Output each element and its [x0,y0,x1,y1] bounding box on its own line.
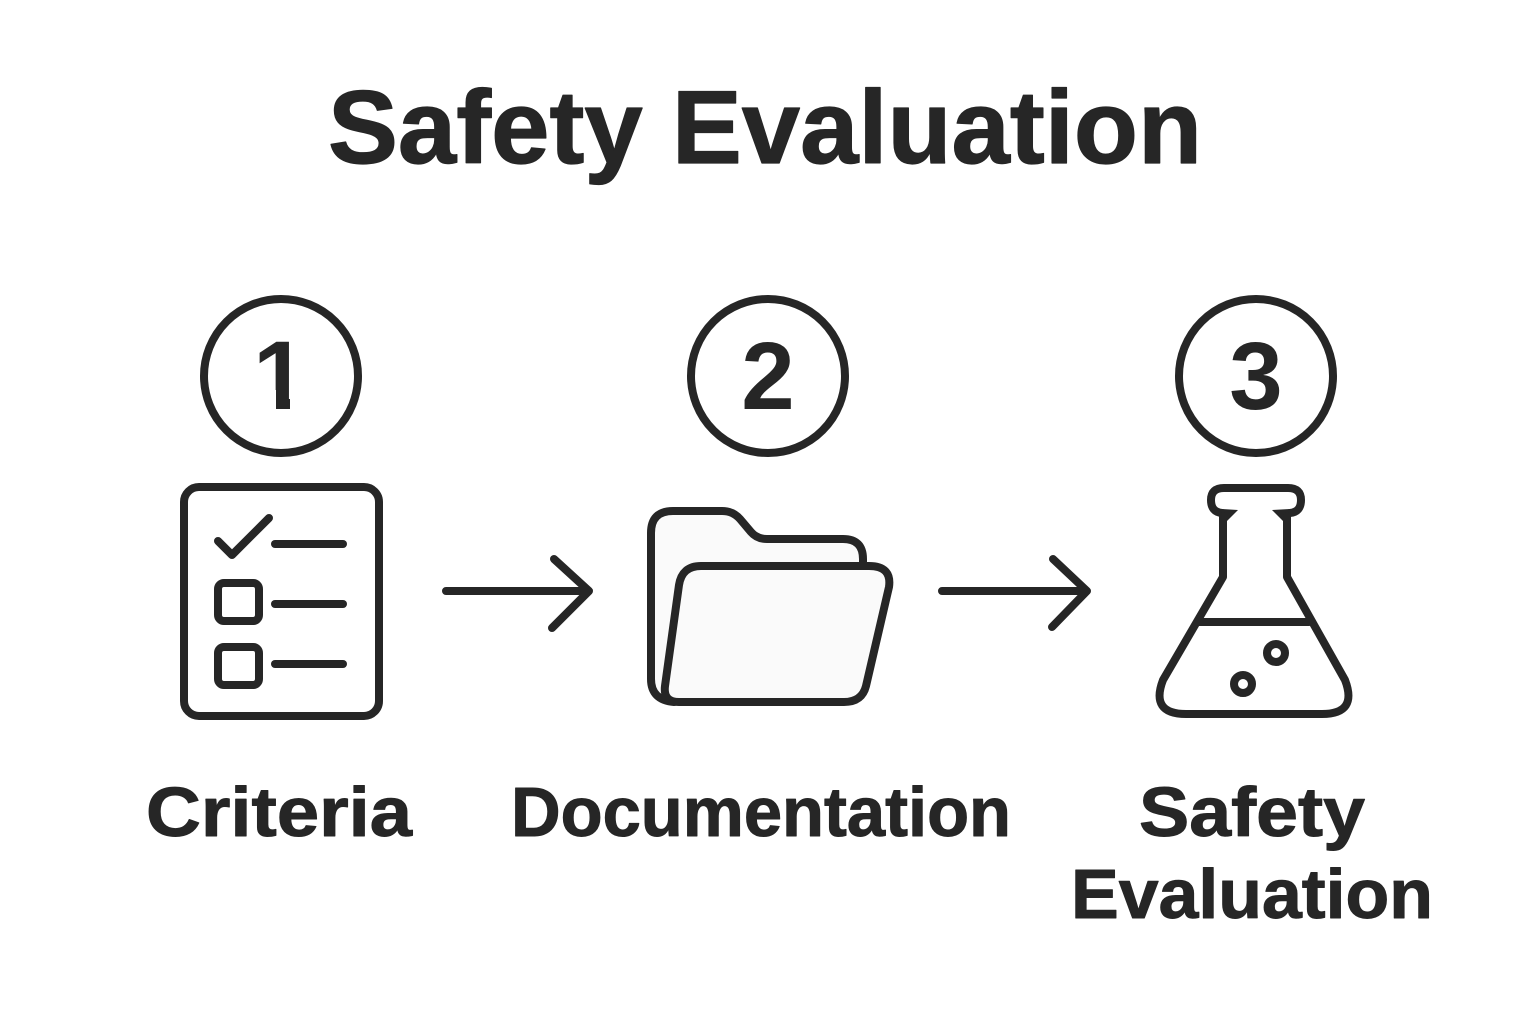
label: safety evaluation: Evaluation [1071,855,1433,933]
step 2 number badge: 2 [741,323,795,430]
step 1 number badge: 1 [253,321,307,430]
icon: criteria checklist [184,487,379,716]
step 3 number badge: 3 [1229,323,1283,430]
step 2 number badge [691,299,845,453]
icon: safety evaluation flask [1160,488,1348,714]
label: criteria: Criteria [146,773,413,851]
arrow: documentation to safety evaluation [942,559,1087,627]
arrow: criteria to documentation [446,559,589,628]
label: safety evaluation: Safety [1139,773,1365,851]
step 1 number badge [204,299,358,453]
step 3 number badge [1179,299,1333,453]
label: safety evaluation [1071,773,1433,933]
icon: documentation folder [651,511,889,702]
label: documentation: Documentation [511,773,1011,851]
title: Safety Evaluation [328,70,1202,186]
